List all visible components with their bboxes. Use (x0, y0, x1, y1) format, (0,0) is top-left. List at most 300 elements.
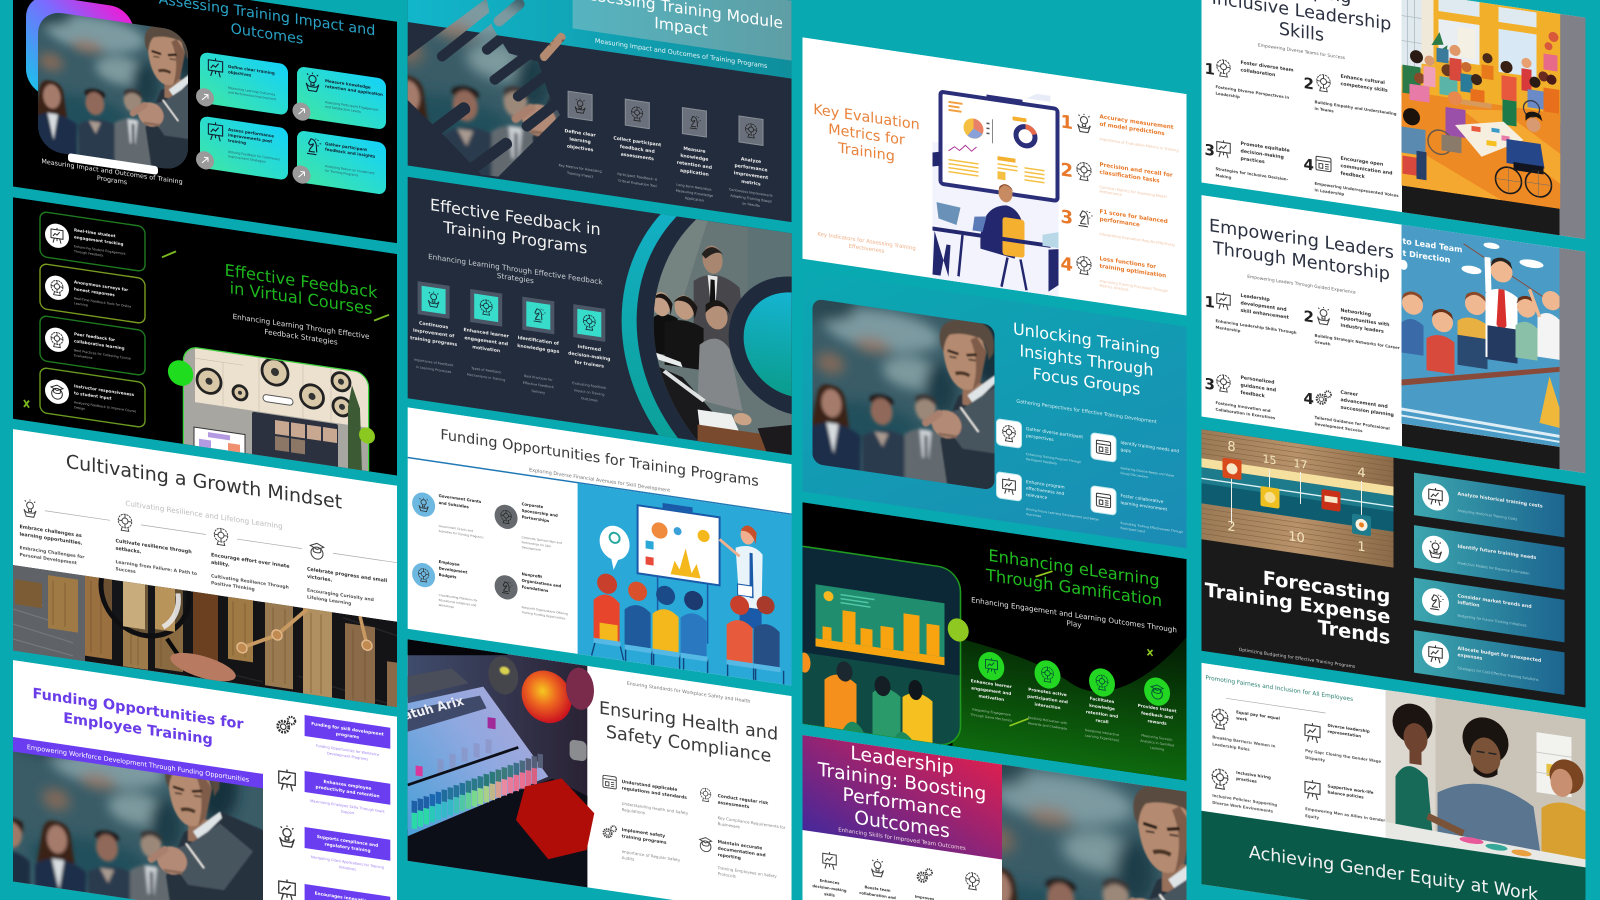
item: safety training (604, 824, 681, 869)
option: nonprofit (495, 567, 568, 621)
title: Focus Groups (1033, 364, 1140, 399)
card: measure knowledge: Measure knowledge (325, 78, 371, 90)
feedback 1: Importance of Feedback (414, 358, 453, 367)
metric 4: 4 (1060, 253, 1073, 276)
insight 2: Group Discussions (1120, 471, 1148, 479)
insight 3: effectiveness and (1026, 486, 1065, 497)
option: grants: Government Grants and (439, 524, 473, 533)
title: Insights Through (1020, 341, 1153, 380)
feedback card 2 (40, 263, 145, 324)
feedback card 4: Design (74, 405, 85, 411)
insight 3 (996, 472, 1100, 527)
slide: Inclusive Leadership Skills (1202, 0, 1586, 240)
teal header band (408, 0, 792, 79)
step 2: Cultivate resilience through (116, 538, 192, 555)
benefit 4: Analytics in Gamified (1140, 739, 1174, 748)
option: budgets: Budgets (439, 572, 457, 580)
skill 4: in Leadership (1314, 187, 1344, 197)
title: Employee Training (63, 710, 213, 748)
metric 3: performance (1099, 217, 1140, 229)
module 4: Adapting Training Based (730, 194, 772, 204)
step 1: Embracing Challenges for (20, 546, 84, 561)
item: risk: Businesses (718, 821, 740, 829)
equity item 2: representation (1328, 729, 1361, 739)
insight 4: Participant Input (1120, 526, 1146, 534)
step 3 (211, 528, 290, 592)
forecast card 1: Analyzing Historical Training Costs (1458, 509, 1518, 521)
feedback card 3: Peer feedback for (74, 331, 115, 342)
module 4: metrics (741, 179, 761, 188)
photo: wooden timeline board: 2 (1227, 519, 1236, 535)
equity item 1: Leadership Roles (1212, 741, 1250, 752)
module 3: application (680, 168, 709, 178)
slide: Leadership Training: Boosting Performance Outcomes (802, 683, 1300, 900)
photo: wooden timeline board: 4 (1357, 465, 1366, 482)
funding item 3: regulatory training (324, 841, 371, 854)
feedback 3: knowledge gaps (517, 343, 560, 355)
photo: wooden timeline board: 15 (1263, 452, 1276, 467)
mentor item 1: Leadership (1240, 294, 1270, 303)
card: gather feedback: for Training Programs (325, 169, 358, 177)
title: Training Expense (1205, 578, 1390, 629)
purple subtitle band: Empowering Workforce Development Through Funding Opportunities (27, 743, 250, 784)
subtitle: Play (1067, 618, 1082, 630)
blue divider (408, 457, 792, 515)
funding item 3: Navigating Grant Applications for Training (311, 855, 384, 870)
skill 4: Empowering Underrepresented Voices (1314, 181, 1399, 198)
photo: speaker wall and video call (182, 347, 370, 472)
item: safety training: training programs (622, 833, 667, 846)
option: grants (412, 489, 484, 540)
option: budgets (412, 555, 478, 613)
title: Key Evaluation (813, 102, 920, 134)
option: budgets: Educational Initiatives and (439, 598, 477, 607)
slide: Enhancing eLearning Through Gamification (782, 499, 1186, 781)
title: Training Programs (442, 217, 587, 258)
mentor item 1: development and (1240, 300, 1287, 313)
insight 2 (1091, 433, 1179, 484)
slide: Effective Feedback in Virtual Courses (13, 197, 397, 493)
feedback 2: motivation (472, 344, 500, 354)
skill 1: Leadership (1215, 91, 1240, 99)
title: Ensuring Health and (599, 699, 778, 745)
title: Cultivating a Growth Mindset (66, 450, 343, 514)
feedback card 1: Real-time student (74, 227, 115, 238)
illustration: analyst at dashboard (932, 78, 1058, 297)
title: Funding Opportunities for (33, 686, 243, 733)
feedback 2 (464, 288, 510, 383)
illustration: team on a beam: t Direction (1402, 249, 1451, 265)
title: Outcomes (231, 21, 303, 48)
title: Trends (1318, 616, 1390, 649)
feedback 4: Evaluating Feedback (572, 381, 606, 390)
item: safety training: Audits (622, 855, 634, 862)
item: safety training: Implement safety (622, 828, 665, 839)
metric 1 (1060, 108, 1179, 153)
benefit 3: knowledge (1089, 703, 1115, 711)
funding item 1 (276, 715, 390, 760)
slide: Ensuring Health and Safety Compliance (400, 638, 792, 900)
feedback 2: Enhanced learner (464, 328, 509, 340)
skill 4: Encourage open (1340, 157, 1383, 168)
photo: man pointing (38, 13, 188, 168)
mentor item 2: Building Strategic Networks for Career (1314, 333, 1400, 350)
option: grants: and Subsidies (439, 500, 470, 509)
step 1 (20, 498, 85, 568)
title: Training: Boosting (817, 758, 986, 805)
title: Training (837, 140, 895, 165)
feedback 3: Identification of (518, 336, 559, 347)
equity item 2: Diverse leadership (1328, 723, 1370, 734)
funding item 1: programs (336, 731, 360, 741)
step 1: Personal Development (19, 552, 78, 567)
card: assess performance (196, 115, 288, 182)
item: safety training: Importance of Regular Safety (622, 849, 680, 863)
subtitle: Enhancing Engagement and Learning Outcomes Through (971, 595, 1177, 635)
forecast card 2 (1414, 525, 1564, 590)
step 4: Celebrate progress and small (307, 566, 387, 584)
teal ring (622, 140, 982, 553)
equity item 4: balance policies (1328, 789, 1364, 800)
forecast card 4: Allocate budget for unexpected (1458, 647, 1541, 664)
step 4: Lifelong Learning (307, 594, 351, 607)
benefit 3: Facilitates (1090, 696, 1114, 704)
feedback card 4 (40, 367, 145, 428)
forecast card 4: expenses (1458, 653, 1483, 662)
equity item 3: Inclusive Policies: Supporting (1212, 793, 1277, 807)
feedback card 1: Through Feedback (73, 249, 104, 258)
mentor item 1: Mentorship (1215, 325, 1241, 333)
benefit 3: retention and (1086, 709, 1118, 719)
module 4: Analyze (741, 157, 761, 165)
item: documentation (700, 836, 777, 885)
forecast card 1: Analyze historical training costs (1458, 491, 1543, 510)
magenta gradient frame behind photo (26, 0, 132, 92)
step 2 (116, 514, 197, 576)
mentor item 2: 2 (1304, 307, 1314, 327)
feedback 4 (568, 303, 610, 405)
skill 1: Fostering Diverse Perspectives in (1216, 84, 1289, 100)
module 4 (729, 114, 773, 210)
card: gather feedback: Analyzing Return on Investment (325, 164, 375, 175)
step 3: Positive Thinking (211, 580, 255, 593)
slide: Funding Opportunities for Employee Training (0, 653, 397, 900)
feedback card 2: Real-Time Feedback Tools for Online (74, 296, 131, 309)
skill 3: practices (1240, 156, 1265, 165)
photo: man pointing with team (13, 752, 263, 900)
equity item 3 (1212, 766, 1277, 814)
feedback card 2: Anonymous surveys for (74, 279, 128, 292)
equity item 3: practices (1236, 776, 1257, 784)
feedback card 4: to student input (74, 390, 112, 401)
subtitle: Key Indicators for Assessing Training (817, 232, 916, 252)
option: budgets: Workshops (439, 603, 455, 609)
equity item 4: Empowering Men as Allies in Gender (1305, 806, 1385, 823)
item: risk: Conduct regular risk (718, 794, 768, 807)
title: Safety Compliance (606, 723, 771, 767)
divider (1226, 698, 1326, 713)
benefit 1: engagement and (971, 685, 1011, 696)
forecast card 4: Strategies for Cost-Effective Training Solutions (1458, 666, 1539, 682)
option: nonprofit: Training Funding Opportunities (521, 610, 566, 621)
funding item 2: productivity and retention (316, 784, 379, 800)
insight 2: Gathering Diverse Needs and Views (1120, 466, 1174, 478)
subtitle: Measuring Impact and Outcomes of Training (41, 157, 183, 186)
outcome icons and labels: skills (824, 892, 836, 898)
title: Through Mentorship (1212, 239, 1390, 285)
funding item 1: Funding Opportunities for Workforce (316, 744, 379, 757)
item: risk: assessments (718, 800, 750, 810)
white caption pill (68, 153, 158, 175)
illustration: inclusive classroom (1402, 0, 1560, 209)
metric 3: F1 score for balanced (1100, 209, 1168, 225)
equity item 2: Disparity (1305, 755, 1325, 763)
photo: colleagues at a table (1386, 690, 1586, 867)
step 1: learning opportunities. (19, 531, 83, 547)
slide: Achieving Gender Equity at Work (1202, 663, 1586, 900)
benefit 3 (1085, 666, 1119, 743)
photo: man pointing (887, 695, 1300, 900)
card: gather feedback (292, 129, 386, 196)
subtitle: Feedback Strategies (264, 327, 338, 347)
skill 3: Making (1215, 173, 1232, 180)
step 3: ability. (211, 560, 230, 568)
benefit 4: Provides instant (1138, 703, 1176, 713)
item: risk: Key Compliance Requirements for (718, 815, 785, 830)
timeline lines (45, 511, 397, 563)
card: gather feedback: Gather participant (325, 141, 367, 152)
photo: man pointing (742, 248, 1072, 512)
card: define objectives (196, 51, 288, 119)
title: Skills (1279, 20, 1324, 46)
card: gather feedback: feedback and insights (325, 147, 376, 159)
insight 4: Foster collaborative (1120, 494, 1163, 505)
option: grants: Government Grants (439, 493, 481, 504)
photo: boardroom meeting (648, 212, 798, 459)
option: corporate: Development (522, 545, 542, 552)
photo: wooden timeline board: 8 (1227, 439, 1236, 455)
metric 4: Metrics Analysis (1099, 284, 1129, 292)
mentor item 2 (1304, 302, 1400, 357)
funding item 4 (279, 878, 390, 900)
card: measure knowledge: retention and application (325, 84, 383, 97)
feedback card 3: Evaluations (74, 353, 93, 360)
subtitle: Empowering Diverse Teams for Success (1258, 42, 1346, 61)
card: define objectives: Define clear training (228, 64, 275, 76)
title: Outcomes (854, 807, 950, 843)
feedback card 3 (40, 315, 145, 376)
forecast card 1 (1414, 473, 1564, 537)
module 1: Define clear (565, 129, 596, 139)
card: assess performance: Improvement Strategies (228, 154, 266, 164)
step 3: Encourage effort over innate (211, 552, 290, 570)
slide: Funding Opportunities for Training Programs (408, 407, 792, 686)
metric 1: of model predictions (1099, 122, 1165, 137)
mentor item 1: skill enhancement (1240, 308, 1290, 321)
item: regulations: Understanding Health and Safety (622, 801, 688, 816)
module 3: Long-term Retention: (676, 183, 712, 192)
feedback card 3: collaborative learning (74, 338, 125, 351)
photo: wooden timeline board: 1 (1357, 539, 1366, 556)
mentor item 3: Fostering Innovation and (1216, 400, 1271, 413)
card: define objectives: and Performance Improvement (228, 90, 277, 101)
feedback card 4: Instructor responsiveness (74, 383, 134, 397)
lighter title box (573, 0, 792, 61)
forecast card 4 (1414, 630, 1564, 695)
step 4: victories. (307, 574, 332, 584)
feedback 1: in Learning Processes (416, 365, 452, 374)
subtitle: Cultivating Resilience and Lifelong Learning (125, 499, 283, 531)
metric 4 (1060, 250, 1168, 298)
skill 2: competency skills (1340, 81, 1388, 94)
item: regulations: Understand applicable (622, 780, 677, 793)
lime dashes (1010, 565, 1152, 747)
mentor item 1: Enhancing Leadership Skills Through (1216, 318, 1297, 335)
funding item 2: Enhances employee (324, 780, 371, 792)
funding item 3: Initiatives (339, 865, 356, 872)
funding item 3: Supports compliance and (317, 835, 378, 849)
inner teal circle (729, 267, 867, 425)
item: documentation: documentation and (718, 846, 766, 859)
photo: wooden timeline board: 10 (1288, 529, 1305, 547)
option: budgets: Crowdfunding Platforms for (439, 593, 478, 603)
skill 1: Foster diverse team (1240, 61, 1294, 74)
skill 2: 2 (1304, 74, 1314, 94)
item: documentation: Training Employees on Safety (718, 865, 777, 879)
module 3: Measure (683, 147, 705, 155)
metric 1: Accuracy measurement (1100, 114, 1173, 131)
feedback card 1 (40, 211, 145, 272)
funding item 1: Development Programs (327, 751, 368, 761)
step 1: Embrace challenges as (20, 524, 82, 539)
mentor item 2: industry leaders (1340, 323, 1384, 335)
photo: analytics tablet and apple: atuh Arix (400, 693, 466, 723)
title: Enhancing eLearning (988, 546, 1160, 590)
skill 3: 3 (1204, 141, 1215, 160)
item: regulations: regulations and standards (622, 785, 687, 801)
subtitle: Enhancing Skills for Improved Team Outcomes (838, 827, 966, 852)
option: corporate (495, 497, 562, 555)
title: Impact (654, 14, 708, 40)
item: documentation: reporting (718, 852, 741, 861)
feedback 4: Impact on Training (574, 388, 605, 397)
mentor item 2: Networking (1340, 309, 1371, 318)
funding item 2: Maximizing Employee Skills Through Grant (310, 799, 385, 814)
mentor item 3: Collaboration in Executives (1215, 407, 1276, 420)
dark lower strip (1402, 185, 1560, 236)
forecast card 2: Predictive Models for Expense Estimation (1458, 561, 1529, 576)
subtitle: Promoting Fairness and Inclusion for All Employees (1205, 675, 1353, 703)
mentor item 2: opportunities with (1340, 315, 1390, 328)
skill 3: decision-making (1240, 148, 1284, 161)
benefit 4 (1138, 675, 1176, 753)
metric 4: Loss functions for (1100, 256, 1156, 270)
card: measure knowledge: and Satisfaction Levels (325, 105, 361, 114)
mentor item 4: advancement and (1340, 397, 1388, 410)
option: corporate: Corporate (522, 501, 543, 509)
forecast card 3: Budgeting for Future Training Initiatives (1458, 614, 1527, 628)
feedback 4: Informed (578, 345, 601, 353)
funding item 1: Funding for skill development (311, 722, 384, 738)
feedback card 4: Analyzing Feedback to Improve Course (74, 400, 136, 413)
module 1: Key Metrics for Assessing (559, 163, 602, 174)
card: define objectives: objectives (228, 69, 252, 78)
title: Unlocking Training (1013, 319, 1160, 360)
step 4 (307, 542, 387, 606)
benefit 2: interaction (1035, 702, 1060, 710)
benefit 4: feedback and (1141, 710, 1173, 720)
title: Funding Opportunities for Training Programs (440, 427, 759, 490)
benefit 1: motivation (979, 693, 1004, 702)
mentor item 3: Personalized (1240, 376, 1274, 386)
mentor item 2: Growth (1314, 339, 1331, 347)
feedback 1: training programs (410, 335, 457, 348)
metric 4: Improving Training Processes Through (1100, 279, 1168, 293)
insight 4: Evaluating Training Effectiveness Through (1120, 521, 1183, 534)
subtitle: Enhancing Learning Through Effective Feedback (428, 252, 602, 286)
feedback card 2: Learning (74, 301, 88, 307)
mentor item 4: Tailored Guidance for Professional (1314, 415, 1390, 431)
mentor item 3: guidance and (1240, 382, 1276, 394)
slide: Empowering Leaders Through Mentorship (1202, 195, 1586, 474)
benefit 1: Through Game Mechanics (970, 712, 1012, 723)
feedback 3: Delivery (531, 389, 545, 395)
equity item 3: Diverse Work Environments (1212, 800, 1274, 814)
equity item 1 (1212, 706, 1280, 756)
insight 2: Identify training needs and (1120, 441, 1179, 455)
metric 4: training optimization (1099, 264, 1166, 279)
metric 3 (1060, 203, 1176, 247)
funding item 2: Support (341, 809, 355, 815)
item: regulations: Regulations (622, 807, 645, 815)
module 4: on Results (742, 201, 760, 208)
equity item 2 (1305, 719, 1382, 771)
forecast card 3: inflation (1458, 600, 1480, 609)
title: Metrics for (828, 122, 905, 149)
feedback 4: Outcomes (581, 396, 598, 403)
metric 2: classification tasks (1099, 170, 1160, 185)
subtitle: Effectiveness (849, 244, 885, 255)
card: assess performance: Assess performance (228, 127, 274, 139)
outcome icons and labels: Enhances (820, 879, 839, 885)
photo: wooden timeline board (1202, 429, 1394, 568)
feedback 3 (517, 296, 560, 397)
option: corporate: Partnerships (522, 514, 550, 523)
skill 2: in Teams (1314, 106, 1334, 114)
benefit 4: Learning (1150, 746, 1164, 752)
item: documentation: Protocols (718, 871, 736, 879)
feedback card 3: Best Practices for Collecting Course (74, 348, 131, 361)
feedback 1: Continuous (419, 321, 448, 331)
option: nonprofit: Nonprofit Organizations Offering (522, 605, 568, 616)
option: nonprofit: Foundations (522, 584, 549, 593)
step 4: Encouraging Curiosity and (307, 588, 374, 603)
gray side band (1560, 14, 1586, 240)
module 3: Application (685, 196, 704, 203)
lime circle (948, 617, 969, 643)
feedback 2: Mechanisms in Training (467, 372, 505, 382)
title: in Virtual Courses (230, 278, 372, 318)
module 1: learning (569, 136, 591, 146)
item: documentation: Maintain accurate (718, 840, 762, 852)
module 3 (676, 107, 713, 204)
skill 1 (1204, 54, 1294, 107)
equity item 4: Equity (1305, 813, 1319, 820)
subtitle: Programs (97, 174, 128, 186)
mentor item 1: 1 (1204, 293, 1215, 312)
green wave (952, 602, 1186, 781)
mentor item 1 (1204, 287, 1297, 342)
